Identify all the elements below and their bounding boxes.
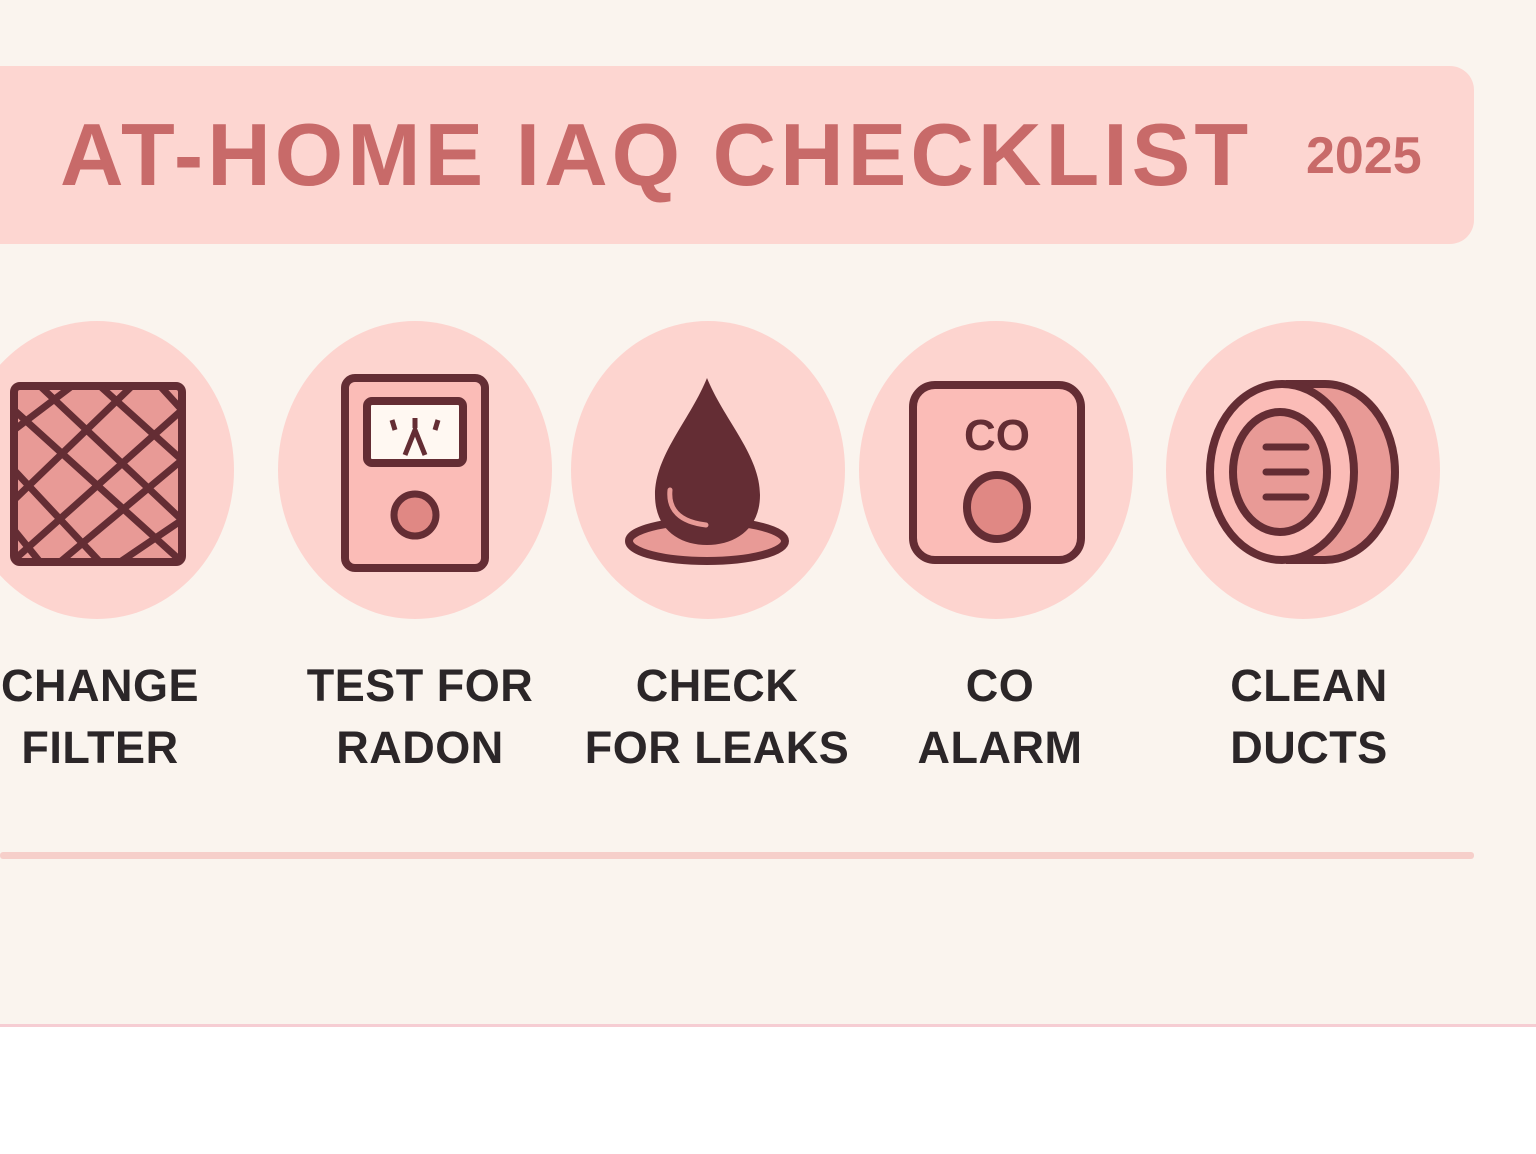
divider [0, 852, 1474, 859]
label: test for radon [307, 660, 533, 773]
title: AT-HOME IAQ CHECKLIST [60, 105, 1252, 204]
label: test for radon: TEST FOR [307, 660, 533, 711]
label: test for radon: RADON [336, 722, 504, 773]
label: change filter: CHANGE [1, 660, 199, 711]
icon: leak drop [571, 321, 845, 619]
label: change filter [1, 660, 199, 773]
icon: filter [0, 321, 234, 619]
label: clean ducts: DUCTS [1230, 722, 1388, 773]
label: co alarm: ALARM [918, 722, 1082, 773]
label: check for leaks: CHECK [636, 660, 798, 711]
label: clean ducts [1230, 660, 1388, 773]
title banner [0, 66, 1474, 244]
label: change filter: FILTER [21, 722, 179, 773]
label: co alarm [918, 660, 1082, 773]
year: 2025 [1306, 127, 1422, 185]
icon: radon meter [278, 321, 552, 619]
icons row [0, 321, 1474, 859]
icon: duct [1166, 321, 1440, 619]
label: co alarm: CO [966, 660, 1034, 711]
label: check for leaks [585, 660, 849, 773]
label: clean ducts: CLEAN [1230, 660, 1388, 711]
icon: CO alarm [859, 321, 1133, 619]
icon: CO alarm: CO [964, 411, 1030, 460]
label: check for leaks: FOR LEAKS [585, 722, 849, 773]
